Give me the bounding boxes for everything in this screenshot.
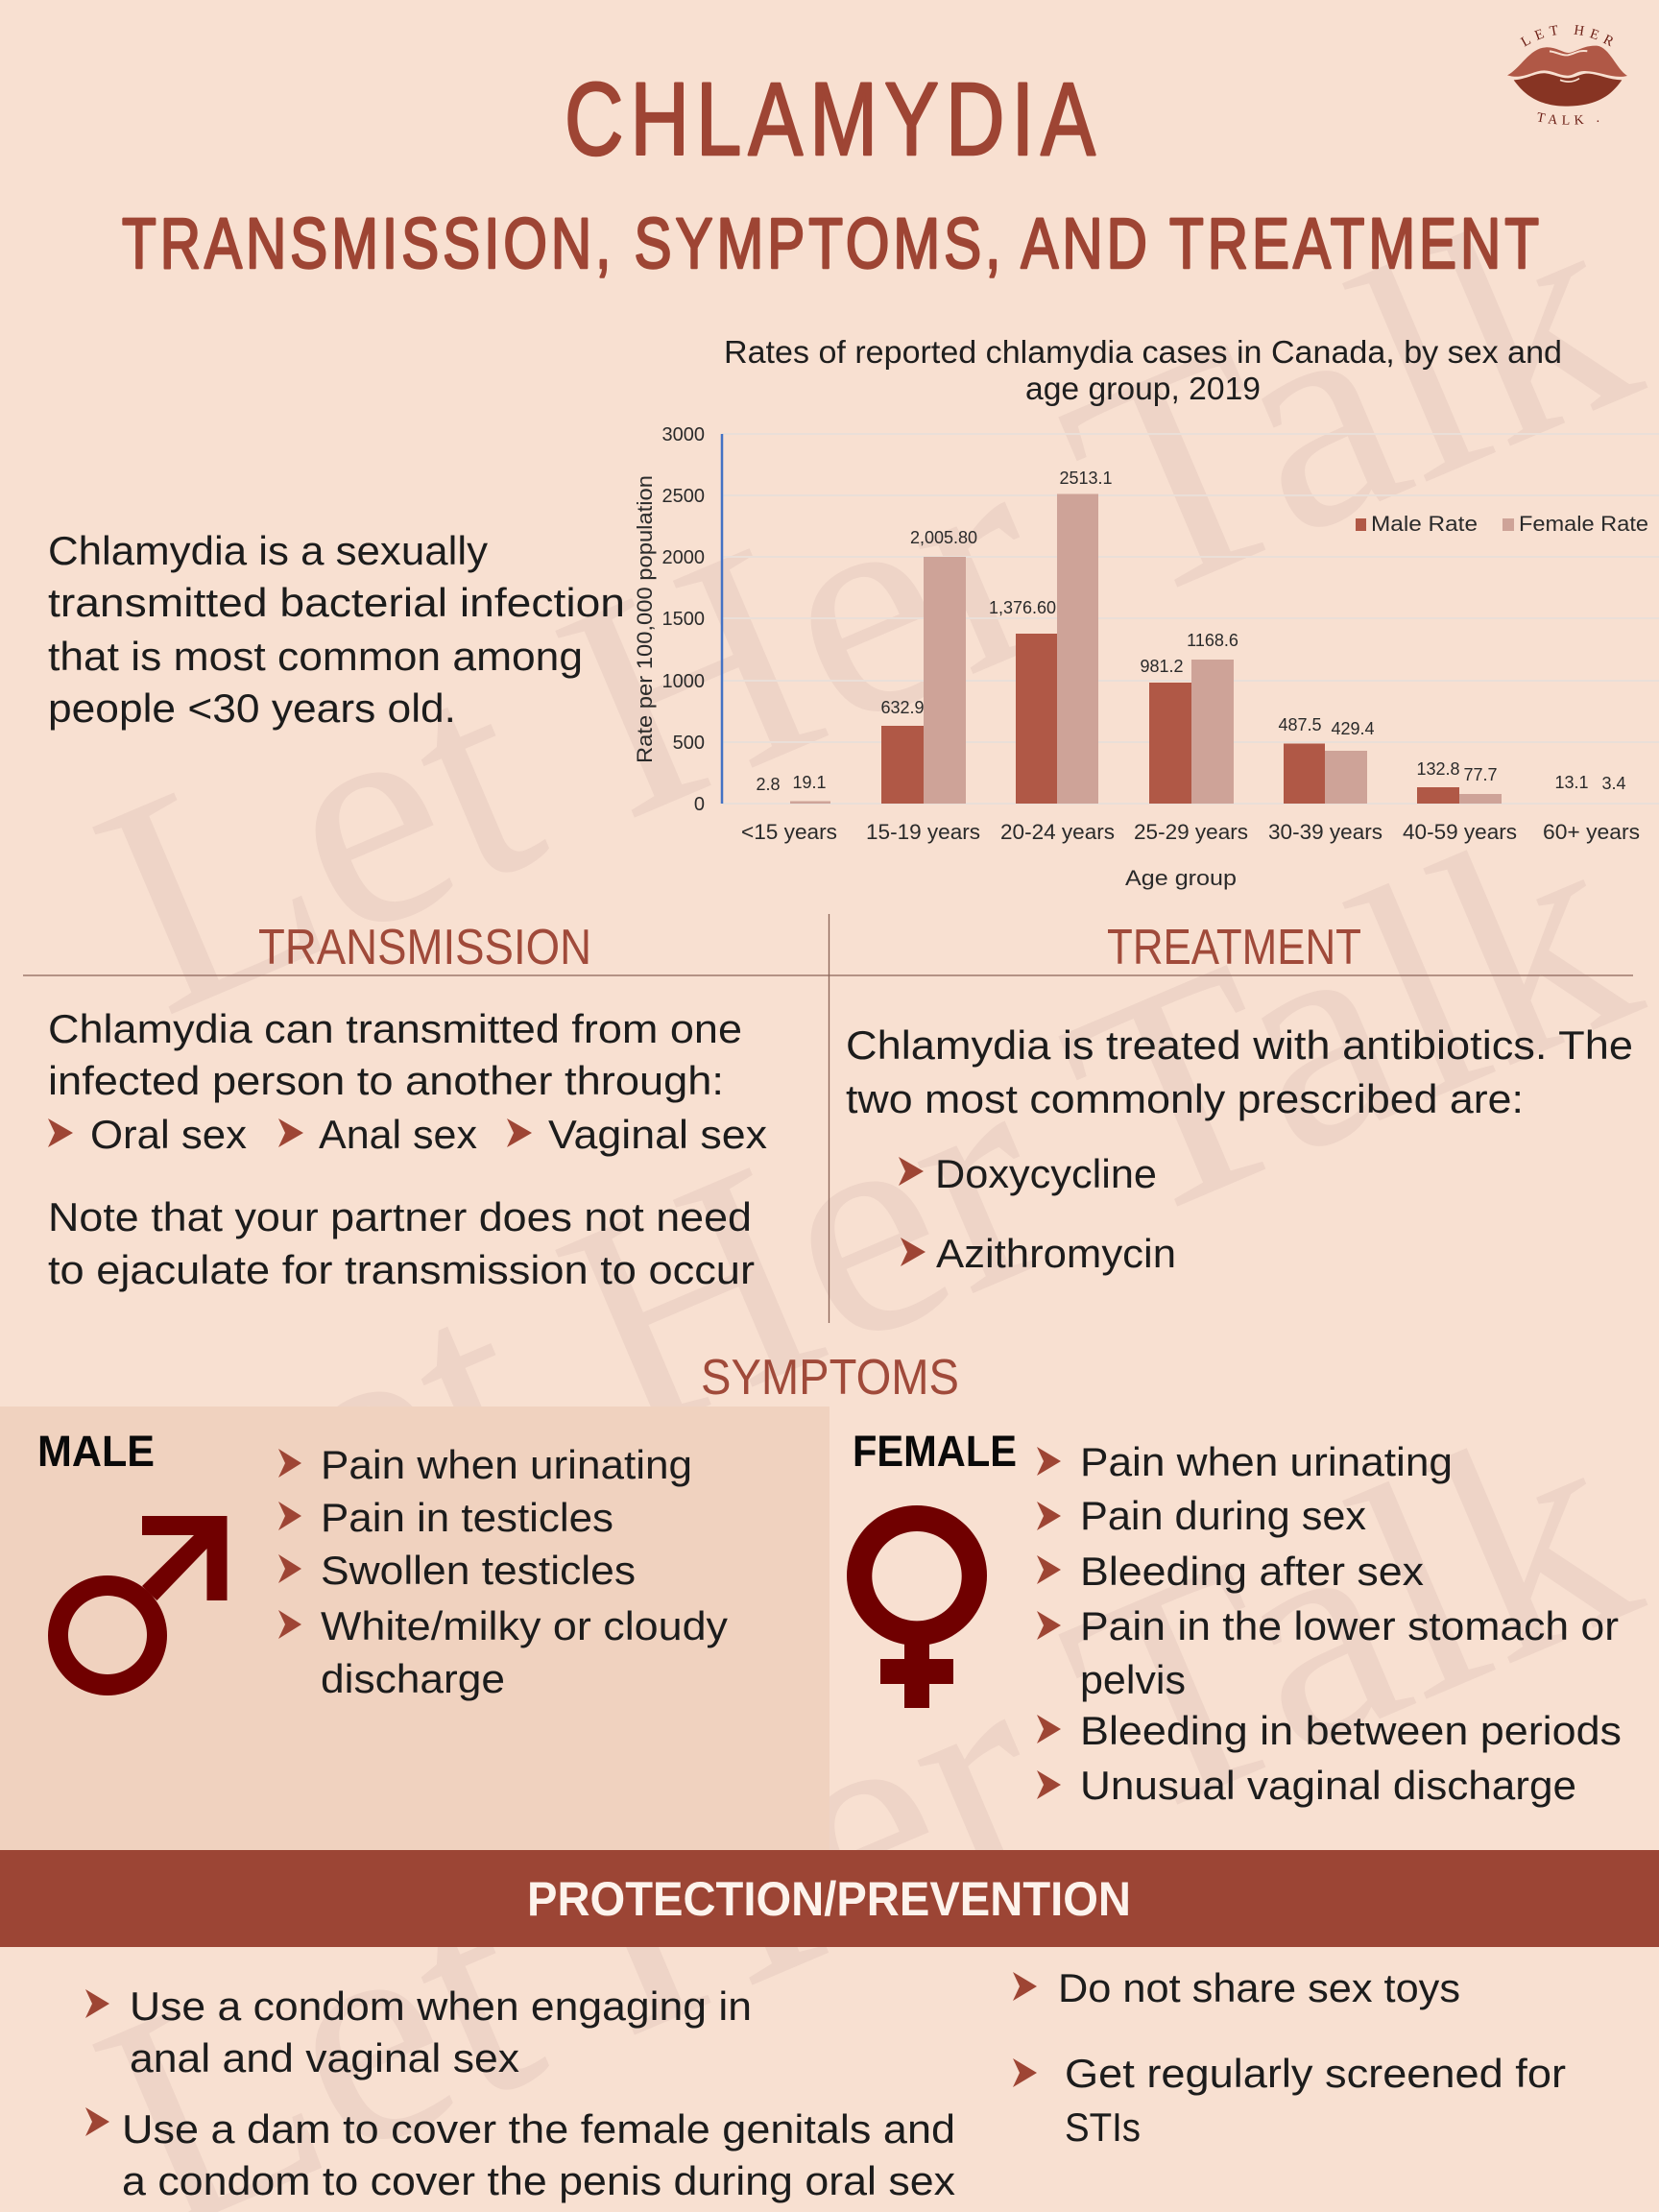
x axis labels [741,820,1640,844]
y axis labels [662,424,705,815]
panel: prevention tips left: anal and vaginal sex [130,2035,519,2080]
heading: symptoms: SYMPTOMS [701,1350,959,1406]
text: Let Her Talk [55,752,1659,1698]
logo: Let Her Talk lips: TALK . [1538,112,1599,125]
panel: prevention tips right: Do not share sex toys [1058,1965,1460,2010]
panel: prevention tips right [1013,1965,1566,2150]
icon: male symbol [48,1516,227,1695]
male label: MALE [37,1427,155,1476]
data labels [756,469,1626,794]
female symptom list: Pain when urinating [1080,1439,1453,1484]
panel: treatment text: two most commonly prescribed are: [846,1076,1524,1121]
panel: prevention tips right: STIs [1065,2104,1141,2150]
female symptom list: Pain in the lower stomach or [1080,1603,1619,1648]
panel: prevention tips left: a condom to cover the penis during oral sex [122,2158,955,2203]
data labels: 487.5 [1278,715,1322,734]
data labels: 2513.1 [1059,469,1113,488]
panel: prevention tips left: Use a dam to cover the female genitals and [122,2106,955,2152]
female symptom list: Bleeding in between periods [1080,1708,1622,1753]
bar chart: rates of reported chlamydia cases [633,334,1659,890]
panel: treatment text: Doxycycline [935,1151,1157,1196]
male symptom list [278,1442,728,1701]
x axis labels: 25-29 years [1134,820,1248,844]
logo: Let Her Talk lips: LET HER [1520,25,1613,47]
male symptom list: Pain in testicles [321,1495,613,1540]
logo: Let Her Talk lips [1507,25,1627,125]
panel: transmission text: Vaginal sex [548,1112,767,1157]
panel: transmission text: Note that your partner does not need [48,1194,752,1239]
chart title [724,334,1562,406]
intro text: transmitted bacterial infection [48,580,625,625]
chart title: age group, 2019 [1025,371,1261,406]
x axis labels: 30-39 years [1268,820,1382,844]
panel: prevention tips left [85,1984,955,2203]
panel: female symptoms [847,1427,1622,1808]
legend: Male Rate [1371,512,1478,536]
legend [1356,512,1648,536]
x axis labels: 20-24 years [1000,820,1115,844]
female symptom list: Pain during sex [1080,1493,1366,1538]
panel: transmission text: Oral sex [90,1112,247,1157]
icon: female symbol [847,1505,987,1708]
y axis labels: 2000 [662,547,705,568]
x axis labels: 15-19 years [866,820,980,844]
heading: transmission: TRANSMISSION [258,920,591,975]
text: Let Her Talk [55,132,1659,1079]
banner: protection/prevention [0,1850,1659,1947]
data labels: 2,005.80 [910,528,977,547]
x axis labels: <15 years [741,820,837,844]
y axis labels: 1000 [662,671,705,692]
female symptom list [1037,1439,1622,1808]
panel: treatment text: Azithromycin [936,1231,1176,1276]
female symptom list: pelvis [1080,1657,1186,1702]
y axis labels: 2500 [662,486,705,507]
y axis title: Rate per 100,000 population [633,475,657,763]
male symptom list: discharge [321,1656,505,1701]
data labels: 1,376.60 [989,598,1056,617]
intro text: that is most common among [48,634,583,679]
data labels: 1168.6 [1187,631,1238,650]
legend: Female Rate [1519,512,1648,536]
intro text: people <30 years old. [48,685,456,731]
panel: prevention tips right: Get regularly screened for [1065,2051,1566,2096]
data labels: 3.4 [1601,774,1626,793]
panel: prevention tips left: Use a condom when engaging in [130,1984,752,2029]
panel: transmission text [48,1006,767,1292]
panel: transmission text: Anal sex [319,1112,477,1157]
female symptom list: Unusual vaginal discharge [1080,1763,1576,1808]
y axis labels: 500 [673,733,705,754]
panel: treatment text: Chlamydia is treated with antibiotics. The [846,1022,1633,1068]
panel: male symptoms [0,1407,830,1850]
intro text [48,528,625,731]
banner: protection/prevention: PROTECTION/PREVENTION [527,1872,1131,1926]
y axis labels: 3000 [662,424,705,445]
panel: transmission text: to ejaculate for transmission to occur [48,1247,755,1292]
panel: transmission text: Chlamydia can transmitted from one [48,1006,742,1051]
female label: FEMALE [853,1427,1017,1476]
data labels: 19.1 [792,773,827,792]
male symptom list: Pain when urinating [321,1442,692,1487]
intro text: Chlamydia is a sexually [48,528,488,573]
female symptom list: Bleeding after sex [1080,1549,1424,1594]
panel: transmission text: infected person to another through: [48,1058,724,1103]
data labels: 632.9 [880,698,925,717]
x axis labels: 40-59 years [1403,820,1517,844]
data labels: 981.2 [1140,657,1184,676]
x axis labels: 60+ years [1543,820,1640,844]
heading: treatment: TREATMENT [1107,920,1361,975]
bars [790,493,1502,804]
data labels: 2.8 [756,775,781,794]
data labels: 13.1 [1554,773,1589,792]
chart title: Rates of reported chlamydia cases in Canada, by sex and [724,334,1562,370]
data labels: 77.7 [1463,765,1498,784]
y axis labels: 1500 [662,609,705,630]
panel: treatment text [846,1022,1633,1276]
data labels: 429.4 [1331,719,1375,738]
male symptom list: White/milky or cloudy [321,1603,728,1648]
x axis title: Age group [1125,866,1237,890]
data labels: 132.8 [1416,759,1460,779]
male symptom list: Swollen testicles [321,1548,636,1593]
y axis labels: 0 [694,794,705,815]
title: CHLAMYDIA [565,60,1102,177]
